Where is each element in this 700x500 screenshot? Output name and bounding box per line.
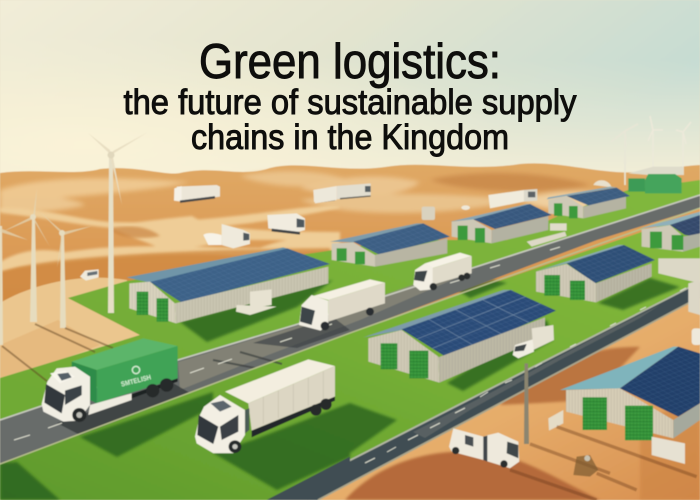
far trailer (488, 189, 537, 208)
title (124, 35, 577, 157)
truck: centre (413, 253, 472, 291)
small unit (550, 223, 567, 231)
truck: green (42, 338, 178, 422)
desert foreground right (300, 290, 700, 500)
road: lower left corner (267, 457, 350, 500)
desert dunes (0, 163, 700, 378)
white dome (593, 180, 612, 187)
trailers on the dune (313, 183, 371, 202)
pole shadow (510, 427, 697, 500)
warehouse: far right (547, 187, 630, 218)
truck: centre right (267, 213, 305, 233)
pallets (527, 232, 567, 247)
delivery truck (449, 428, 519, 468)
truck: right (313, 187, 337, 203)
small car (461, 205, 470, 210)
van by warehouse (513, 325, 554, 358)
truck: upper white (299, 279, 385, 331)
warehouse: upper left (330, 223, 450, 267)
truck: centre (203, 224, 250, 248)
truck logo: SMTELISH (120, 374, 152, 389)
dune vehicles (80, 185, 337, 281)
warehouse: right edge (640, 212, 700, 252)
truck: white foreground (195, 359, 335, 453)
utility pole (524, 363, 529, 444)
white building (658, 258, 700, 283)
sky background (0, 0, 700, 180)
wind turbines (0, 132, 148, 382)
road: secondary (272, 282, 700, 500)
title line 1: Green logistics: (199, 35, 501, 89)
turbine shadows (2, 324, 113, 382)
field: upper (0, 180, 700, 420)
green fields (0, 180, 700, 500)
van: far left (80, 269, 99, 281)
worker with bicycle (573, 455, 598, 477)
block by warehouse (548, 410, 563, 431)
generator box (652, 437, 685, 464)
warehouse: right (535, 245, 655, 302)
warehouse: centre large (363, 290, 556, 383)
warehouse: left (127, 247, 330, 323)
turbine: left edge (0, 226, 28, 345)
turbine: mid (2, 188, 50, 322)
road: main (0, 195, 700, 464)
warehouse: middle far (450, 204, 552, 243)
truck: edge (688, 280, 700, 315)
field: middle (0, 212, 700, 500)
truck: far left (174, 185, 220, 202)
storage tank (422, 207, 435, 220)
pale dune crests (0, 206, 340, 272)
warehouses and trucks (left half) (42, 247, 385, 500)
warehouse: foreground (560, 347, 700, 440)
title line 2: the future of sustainable supply (124, 83, 577, 122)
green containers (628, 167, 683, 193)
title line 3: chains in the Kingdom (191, 118, 509, 157)
ground shadows (0, 278, 680, 500)
turbine: main (88, 132, 148, 313)
turbine: right small (40, 212, 92, 328)
far depot (313, 167, 700, 267)
warehouses and trucks (right half) (363, 245, 700, 500)
vehicle: edge (692, 328, 700, 345)
far wind turbines (611, 116, 691, 185)
